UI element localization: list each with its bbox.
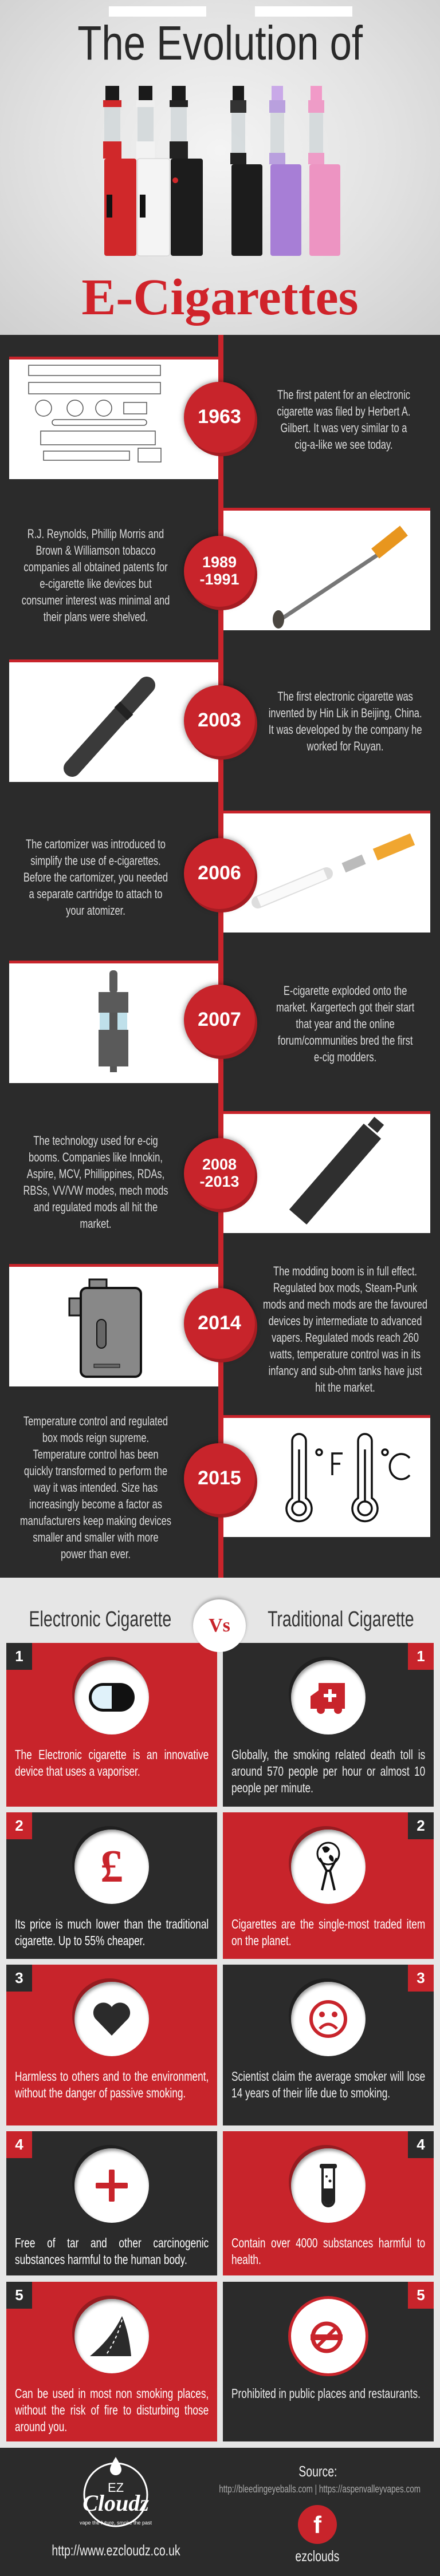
text 2008: The technology used for e-cig <box>33 1133 158 1148</box>
text 2007: market. Kargertech got their start <box>276 1000 414 1014</box>
card 1 left <box>6 1643 217 1807</box>
timeline 1963 <box>9 357 410 479</box>
text 2008: market. <box>80 1216 112 1231</box>
card 4 right <box>223 2131 434 2275</box>
text 2014: Regulated box mods, Steam-Punk <box>273 1281 417 1295</box>
text 2003: worked for Ruyan. <box>307 739 384 753</box>
text 1963: cig-a-like we see today. <box>294 437 393 452</box>
card 1 right <box>223 1643 434 1807</box>
text 2014: The modding boom is in full effect. <box>273 1264 417 1278</box>
icon: atlas globe <box>291 1830 366 1904</box>
logo: EZ Cloudz: EZ <box>108 2480 124 2495</box>
icon: facebook: f <box>313 2511 321 2538</box>
text 2006: your atomizer. <box>66 903 125 918</box>
text 2014: watts, temperature control was in its <box>270 1347 421 1361</box>
VS badge: Vs <box>209 1615 230 1636</box>
image: thermometers <box>223 1415 430 1537</box>
text 2007: forum/communities bred the first <box>278 1033 412 1048</box>
text 1989: R.J. Reynolds, Phillip Morris and <box>28 527 164 541</box>
text 2015: manufacturers keep making devices <box>20 1514 171 1528</box>
text 2015: increasingly become a factor as <box>29 1497 162 1511</box>
timeline 2015 <box>20 1414 430 1561</box>
text 1989: Brown & Williamson tobacco <box>36 543 156 558</box>
year badge 2015 <box>184 1443 255 1514</box>
timeline 2014 <box>9 1264 427 1394</box>
source: Source: <box>298 2463 337 2480</box>
year badge 2008-2013: 2008 <box>202 1156 237 1173</box>
text 2003: The first electronic cigarette was <box>277 689 413 704</box>
text 2008: Aspire, MCV, Phillippines, RDAs, <box>27 1167 164 1181</box>
text 2007: E-cigarette exploded onto the <box>284 983 407 998</box>
text 2008: and regulated mods all hit the <box>34 1200 158 1214</box>
text 2015: Temperature control has been <box>33 1447 159 1461</box>
text 2014: infancy and sub-ohm tanks have just <box>269 1364 422 1378</box>
text 1963: cigarette was filed by Herbert A. <box>277 404 410 418</box>
icon: ambulance <box>291 1660 366 1735</box>
text 1989: their plans were shelved. <box>44 610 148 624</box>
card 2 right <box>223 1812 434 1959</box>
text 2015: Temperature control and regulated <box>23 1414 168 1428</box>
card 5 right: Prohibited in public places and restaurants. <box>231 2386 421 2401</box>
year badge 1963: 1963 <box>198 406 241 428</box>
year badge 2015: 2015 <box>198 1467 241 1489</box>
card 5 right: 5 <box>417 2286 425 2304</box>
card 3 left: Harmless to others and to the environment, without the danger of passive smoking. <box>15 2069 209 2100</box>
text 2015: smaller and smaller with more <box>33 1530 159 1544</box>
card 5 left <box>6 2282 217 2441</box>
text 2003 <box>269 689 422 753</box>
text 1989 <box>22 527 170 624</box>
year badge 2003 <box>184 685 255 756</box>
year badge 1963 <box>184 382 255 453</box>
title: The Evolution of: The Evolution of <box>77 16 363 70</box>
text 2006: The cartomizer was introduced to <box>26 837 166 851</box>
card 3 right: 3 <box>417 1969 425 1986</box>
text 1989: consumer interest was minimal and <box>22 593 170 607</box>
card 5 left: 5 <box>15 2286 23 2304</box>
year badge 2006: 2006 <box>198 862 241 884</box>
icon: test tube <box>291 2148 366 2223</box>
timeline 2007 <box>9 961 415 1083</box>
year badge 2007 <box>184 985 255 1056</box>
icon: no smoking <box>291 2299 366 2373</box>
year badge 1989-1991: 1989 <box>202 554 237 571</box>
icon: pound: £ <box>100 1841 123 1891</box>
card 5 right <box>223 2282 434 2441</box>
icon: sad face <box>291 1982 366 2056</box>
card 1 right: 1 <box>417 1647 425 1665</box>
devices illustration <box>103 86 340 256</box>
logo: EZ Cloudz: vape the future, smoke the past <box>80 2520 152 2526</box>
website url: http://www.ezcloudz.co.uk <box>52 2542 180 2559</box>
text 2006: Before the cartomizer, you needed <box>23 870 168 884</box>
text 2007: e-cig modders. <box>314 1050 376 1064</box>
text 2015: power than ever. <box>61 1547 131 1561</box>
text 2006: a separate cartridge to attach to <box>29 887 162 901</box>
text 2008 <box>23 1133 168 1231</box>
text 2015: way it was intended. Size has <box>34 1480 158 1495</box>
card 4 left: 4 <box>15 2136 23 2153</box>
heading: Electronic Cigarette: Electronic Cigarette <box>29 1607 171 1631</box>
icon: heart <box>74 1982 149 2056</box>
timeline 2006 <box>23 811 430 933</box>
timeline panel <box>0 335 440 1578</box>
card 4 right: Contain over 4000 substances harmful to health. <box>231 2235 425 2267</box>
card 3 left <box>6 1965 217 2125</box>
year badge 2008-2013: -2013 <box>199 1173 239 1190</box>
year badge 2006 <box>184 838 255 909</box>
card 1 left: 1 <box>15 1647 23 1665</box>
logo: EZ Cloudz <box>80 2457 152 2527</box>
text 2007 <box>276 983 415 1064</box>
icon: toggle <box>74 1660 149 1735</box>
year badge 1989-1991: -1991 <box>199 571 239 588</box>
year badge 2014: 2014 <box>198 1312 241 1334</box>
text 2015 <box>20 1414 171 1561</box>
image: battery <box>9 659 218 782</box>
timeline 2008-2013 <box>23 1111 430 1233</box>
heading: Traditional Cigarette: Traditional Cigarette <box>268 1607 414 1631</box>
footer: http://bleedingeyeballs.com | https://aspenvalleyvapes.com <box>219 2483 421 2495</box>
logo: EZ Cloudz: Cloudz <box>82 2490 149 2516</box>
icon: road <box>74 2299 149 2373</box>
card 1 left: The Electronic cigarette is an innovative device that uses a vaporiser. <box>15 1747 209 1779</box>
text 2007: that year and the online <box>296 1017 395 1031</box>
header <box>0 0 440 335</box>
text 2008: booms. Companies like Innokin, <box>29 1150 163 1164</box>
text 1989: e-cigarette like devices but <box>40 576 152 591</box>
year badge 2008-2013 <box>184 1138 255 1209</box>
card 3 right <box>223 1965 434 2125</box>
card 2 left: Its price is much lower than the traditional cigarette. Up to 55% cheaper. <box>15 1917 209 1948</box>
text 2006: simplify the use of e-cigarettes. <box>30 854 161 868</box>
year badge 1989-1991 <box>184 536 255 607</box>
text 1963: Gilbert. It was very similar to a <box>281 421 407 435</box>
footer: ezclouds <box>295 2547 339 2565</box>
text 2014: hit the market. <box>315 1380 375 1394</box>
text 2006 <box>23 837 168 918</box>
card 2 left: 2 <box>15 1817 23 1834</box>
card 3 right: Scientist claim the average smoker will lose 14 years of their life due to smoking. <box>231 2069 425 2100</box>
text 1963 <box>277 388 410 452</box>
footer <box>0 2448 440 2576</box>
year badge 2003: 2003 <box>198 709 241 731</box>
image: pipe <box>223 508 430 630</box>
image: tank <box>9 961 218 1083</box>
card 2 right: 2 <box>417 1817 425 1834</box>
title: E-Cigarettes: E-Cigarettes <box>81 269 359 326</box>
text 1989: companies all obtained patents for <box>23 560 168 574</box>
timeline 2003 <box>9 659 422 782</box>
text 2003: invented by Hin Lik in Beijing, China. <box>269 706 422 720</box>
icon: facebook <box>298 2505 337 2544</box>
card 1 right: Globally, the smoking related death toll is around 570 people per hour or almost 10 people per minute. <box>231 1747 425 1795</box>
text 2015: box mods reign supreme. <box>42 1431 149 1445</box>
text 2014: mods and mech mods are the favoured <box>263 1297 427 1311</box>
timeline 1989-1991 <box>22 508 430 630</box>
card 2 left <box>6 1812 217 1959</box>
icon: plus <box>74 2148 149 2223</box>
card 4 left: Free of tar and other carcinogenic substances harmful to the human body. <box>15 2235 209 2267</box>
card 4 left <box>6 2131 217 2275</box>
text 2003: It was developed by the company he <box>269 722 422 737</box>
card 2 right: Cigarettes are the single-most traded item on the planet. <box>231 1917 425 1948</box>
text 2014: devices by intermediate to advanced <box>269 1314 422 1328</box>
VS badge <box>193 1599 246 1652</box>
year badge 2014 <box>184 1288 255 1359</box>
text 2014 <box>263 1264 427 1394</box>
image: cartomizer <box>223 811 430 933</box>
year badge 2007: 2007 <box>198 1009 241 1030</box>
card 5 left: Can be used in most non smoking places, without the risk of fire to disturbing those around you. <box>15 2386 209 2434</box>
text 2008: RBSs, VV/VW modes, mech mods <box>23 1183 168 1198</box>
text 1963: The first patent for an electronic <box>277 388 410 402</box>
text 2014: vapers. Regulated mods reach 260 <box>272 1330 419 1345</box>
text 2015: quickly transformed to perform the <box>24 1464 167 1478</box>
card 4 right: 4 <box>417 2136 425 2153</box>
card 3 left: 3 <box>15 1969 23 1986</box>
image: box mod <box>9 1264 218 1386</box>
image: patent drawing <box>9 357 218 479</box>
image: mod tube <box>223 1111 430 1233</box>
icon: pound <box>74 1830 149 1904</box>
